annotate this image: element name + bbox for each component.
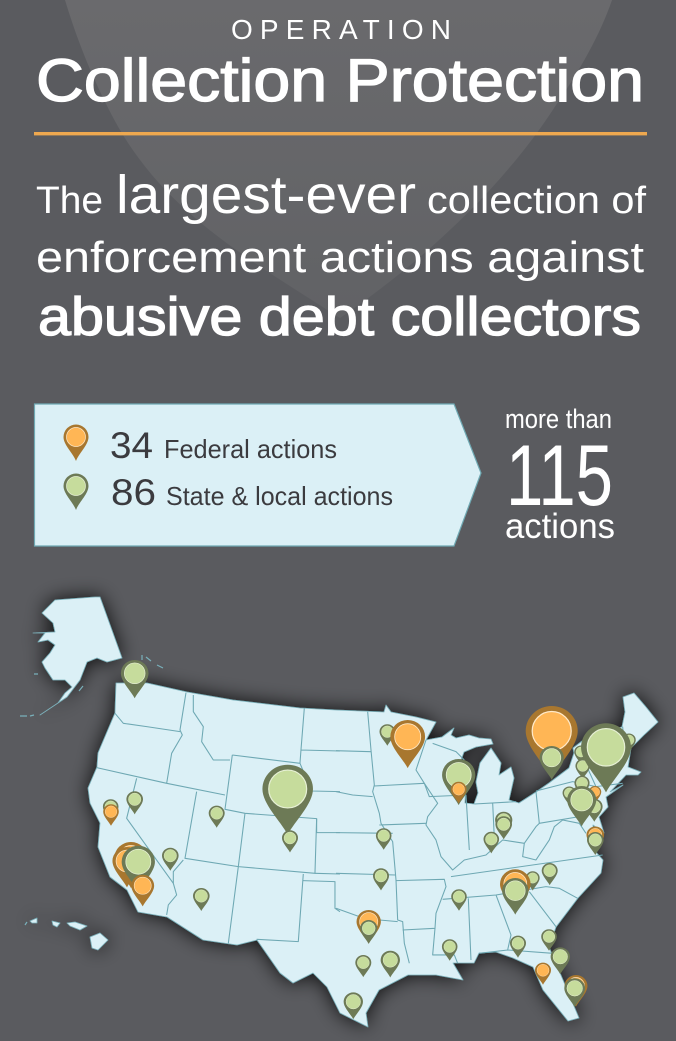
pin: Dallas federal (357, 910, 381, 944)
panel arrow (34, 404, 481, 546)
pin: Houston (381, 951, 400, 977)
subheading (36, 165, 646, 347)
pin: New Jersey state (586, 799, 603, 822)
pin: Los Angeles federal (112, 847, 142, 887)
pin: Colorado small (282, 830, 298, 852)
state count: 86 (111, 472, 156, 513)
pin: Utah (209, 806, 225, 828)
pin: central Texas (355, 955, 371, 977)
pin: Colorado large (262, 765, 313, 835)
pin: upstate New York a (574, 746, 588, 764)
map (20, 597, 658, 1027)
pin: Savannah (541, 929, 557, 951)
pin: Oklahoma (373, 868, 389, 890)
pin: Kansas City (376, 828, 392, 850)
pin: Buffalo state (540, 746, 564, 780)
pin: northern California federal (103, 804, 119, 826)
state borders: east (336, 712, 626, 963)
pin: Atlanta state (502, 878, 529, 915)
more than: more than (505, 404, 612, 434)
pin: Indiana (484, 832, 499, 853)
pin: Wisconsin state (442, 759, 475, 805)
actions: actions (505, 507, 615, 546)
pin: Nevada north (126, 791, 143, 814)
federal count: 34 (110, 425, 153, 466)
pin: Miami federal (565, 975, 587, 1007)
pin: upstate New York b (575, 759, 590, 779)
map pins (103, 660, 636, 1019)
pin: New York large (581, 723, 631, 792)
total callout (505, 404, 615, 546)
pin: Las Vegas (162, 848, 179, 871)
pin: North Carolina (542, 863, 558, 885)
orange rule (34, 132, 647, 135)
pin: San Diego federal (131, 875, 154, 906)
pin: San Antonio (344, 992, 363, 1019)
Alaska island details (20, 655, 163, 925)
pin: Pennsylvania main (567, 786, 596, 826)
pin: Jacksonville (551, 947, 570, 974)
line 1: collection of (427, 180, 646, 222)
line 2: enforcement actions against (36, 233, 644, 282)
pin: Maine small (622, 734, 636, 752)
map land: US, Alaska, Hawaii (30, 597, 658, 1027)
pin: New Jersey federal (589, 786, 601, 803)
pin: Tampa federal (535, 963, 551, 985)
federal label: Federal actions (164, 434, 337, 464)
icon: federal pin (64, 424, 88, 461)
pin: Los Angeles state (122, 846, 155, 892)
pin: DC federal (586, 826, 604, 851)
pin: Los Angeles federal large (114, 842, 148, 888)
state label: State & local actions (166, 481, 393, 511)
pin: Arizona (193, 888, 210, 911)
title: Collection Protection (36, 47, 644, 114)
pin: Chicago federal (451, 782, 466, 803)
pin: Louisiana (442, 939, 458, 961)
pin: Atlanta federal (500, 869, 531, 912)
pin: northern California state (103, 799, 118, 821)
pin: Dallas state (360, 920, 377, 944)
pin: Buffalo federal large (526, 706, 578, 778)
overline: operation: OPERATION (231, 14, 451, 45)
line 1: The (36, 180, 103, 222)
pin: Seattle (121, 660, 149, 698)
total number: 115 (506, 428, 613, 524)
pin: Miami state (564, 978, 585, 1007)
pin: DC state (587, 832, 604, 855)
line 1: largest-ever (116, 165, 416, 225)
pin: Ohio front (495, 816, 512, 839)
state borders: west (97, 693, 340, 943)
header (34, 14, 647, 135)
pin: Pennsylvania b (563, 786, 576, 805)
legend panel (34, 404, 481, 546)
pin: Mississippi north (451, 889, 467, 911)
icon: state pin (64, 474, 88, 510)
pin: Minnesota state (380, 724, 395, 746)
pin: south Georgia (510, 936, 526, 958)
pin: Minnesota federal (390, 720, 425, 768)
pin: Ohio behind (495, 812, 512, 836)
line 3: abusive debt collectors (38, 287, 641, 347)
pin: Tennessee east (526, 871, 540, 891)
background cone (65, 0, 612, 318)
pin: Pennsylvania a (574, 776, 590, 797)
